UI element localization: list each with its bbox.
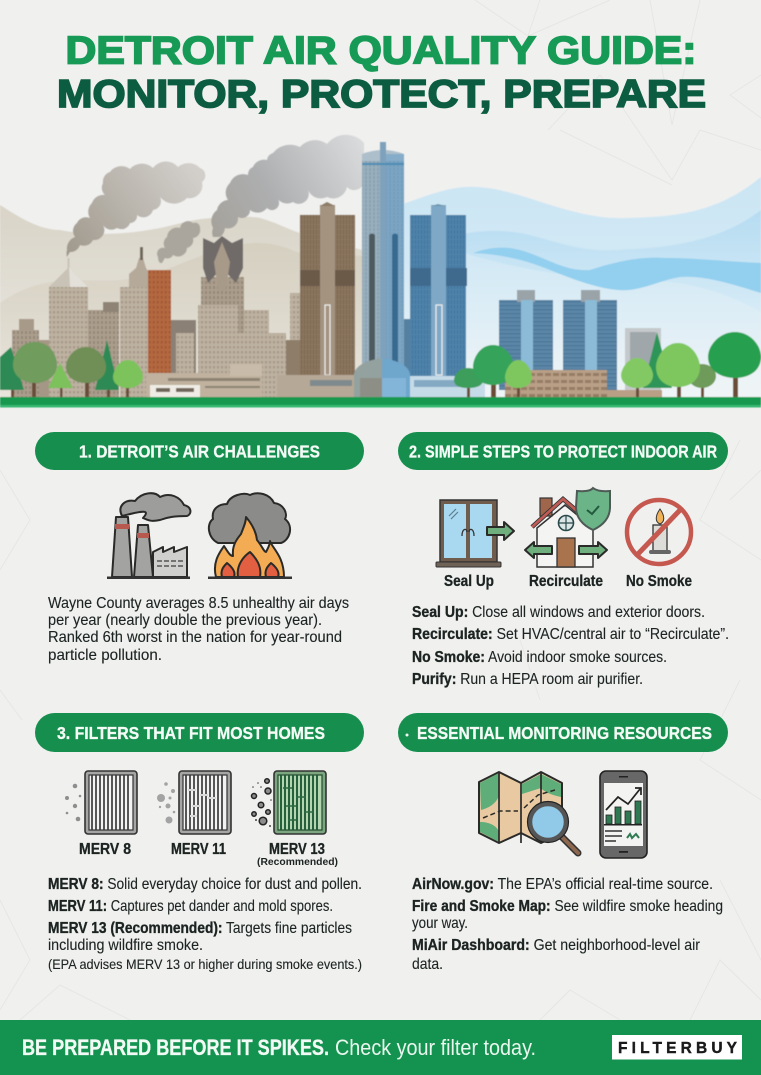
icon: recirculating house with shield bbox=[525, 488, 610, 567]
text block: monitoring resources: MiAir Dashboard: Get neighborhood-level air bbox=[412, 937, 701, 954]
text block: air challenges: Wayne County averages 8.5 unhealthy air days bbox=[48, 595, 349, 612]
text block: filters bbox=[48, 876, 362, 972]
text block: steps: Recirculate: Set HVAC/central air to “Recirculate”. bbox=[412, 626, 729, 643]
logo: Filterbuy: FILTERBUY bbox=[618, 1040, 738, 1057]
icon labels: MERV ratings: (Recommended) bbox=[257, 856, 338, 868]
icon: phone with chart bbox=[600, 771, 647, 858]
panel: Detroit's air challenges bbox=[35, 432, 364, 664]
text block: monitoring resources: data. bbox=[412, 956, 443, 973]
icon labels: steps bbox=[444, 573, 692, 590]
clean sky waves bbox=[400, 177, 761, 397]
icon labels: MERV ratings: MERV 8 bbox=[79, 841, 131, 858]
icon labels: MERV ratings: MERV 13 bbox=[269, 841, 325, 858]
title bbox=[57, 30, 706, 116]
icon: map with magnifier bbox=[479, 772, 578, 853]
icon: sealed window bbox=[436, 500, 514, 567]
Renaissance Center main tower bbox=[362, 142, 404, 382]
icon labels: steps: Seal Up bbox=[444, 573, 494, 590]
heading pill 3: 3. FILTERS THAT FIT MOST HOMES bbox=[57, 723, 325, 743]
text block: monitoring resources: your way. bbox=[412, 915, 468, 932]
icon: MERV 8 filter bbox=[65, 771, 137, 834]
heading pill 4: ESSENTIAL MONITORING RESOURCES bbox=[417, 723, 712, 743]
text block: steps: No Smoke: Avoid indoor smoke sources. bbox=[412, 649, 667, 666]
text block: monitoring resources: Fire and Smoke Map: See wildfire smoke heading bbox=[412, 898, 723, 915]
brown towers bbox=[300, 202, 355, 395]
text block: filters: MERV 13 (Recommended): Targets fine particles bbox=[48, 920, 352, 937]
polluted hills bbox=[0, 205, 362, 397]
icon labels: steps: Recirculate bbox=[529, 573, 603, 590]
title: DETROIT AIR QUALITY GUIDE: bbox=[66, 30, 696, 72]
text block: air challenges bbox=[48, 595, 349, 664]
illustration: Detroit skyline bbox=[0, 135, 761, 407]
text block: steps: Purify: Run a HEPA room air purifier. bbox=[412, 671, 643, 688]
text block: air challenges: particle pollution. bbox=[48, 647, 162, 664]
logo: Filterbuy bbox=[612, 1035, 742, 1060]
text block: filters: MERV 8: Solid everyday choice for dust and pollen. bbox=[48, 876, 362, 893]
text block: air challenges: per year (nearly double the previous year). bbox=[48, 612, 322, 629]
text block: filters: (EPA advises MERV 13 or higher during smoke events.) bbox=[48, 956, 362, 972]
left buildings bbox=[12, 236, 300, 397]
heading pill 4 bbox=[398, 713, 728, 752]
icon: wildfire with smoke bbox=[208, 493, 292, 579]
icon labels: MERV ratings bbox=[79, 841, 338, 868]
text block: filters: MERV 11: Captures pet dander and mold spores. bbox=[48, 898, 333, 915]
text block: steps bbox=[412, 604, 729, 688]
trees bbox=[0, 332, 761, 397]
panel: filters that fit most homes bbox=[35, 713, 364, 972]
text block: filters: including wildfire smoke. bbox=[48, 937, 203, 954]
heading pill 1 bbox=[35, 432, 364, 470]
smoke plumes bbox=[66, 135, 364, 263]
low-rise podium buildings bbox=[146, 358, 662, 397]
icon: no smoke candle bbox=[627, 500, 691, 564]
text block: air challenges: Ranked 6th worst in the nation for year-round bbox=[48, 629, 342, 646]
footer banner bbox=[0, 1020, 761, 1075]
panel: essential monitoring resources bbox=[398, 713, 728, 973]
heading pill 3 bbox=[35, 713, 364, 752]
right towers bbox=[499, 290, 661, 390]
icon labels: MERV ratings: MERV 11 bbox=[171, 841, 226, 858]
icon: MERV 13 filter bbox=[252, 771, 326, 834]
icon: factory with smoke bbox=[107, 493, 190, 579]
heading pill 2 bbox=[398, 432, 728, 470]
ground strip bbox=[0, 397, 761, 408]
heading pill 1: 1. DETROIT’S AIR CHALLENGES bbox=[79, 442, 320, 462]
icon: MERV 11 filter bbox=[157, 771, 231, 834]
panel: simple steps to protect indoor air bbox=[398, 432, 729, 688]
text block: monitoring resources: AirNow.gov: The EPA’s official real-time source. bbox=[412, 876, 713, 893]
icon labels: steps: No Smoke bbox=[626, 573, 692, 590]
footer call to action: Check your filter today. bbox=[335, 1035, 536, 1060]
blue towers bbox=[404, 204, 467, 395]
text block: steps: Seal Up: Close all windows and exterior doors. bbox=[412, 604, 705, 621]
title: MONITOR, PROTECT, PREPARE bbox=[57, 73, 706, 116]
text block: monitoring resources bbox=[412, 876, 723, 973]
footer call to action: BE PREPARED BEFORE IT SPIKES. bbox=[22, 1035, 329, 1060]
